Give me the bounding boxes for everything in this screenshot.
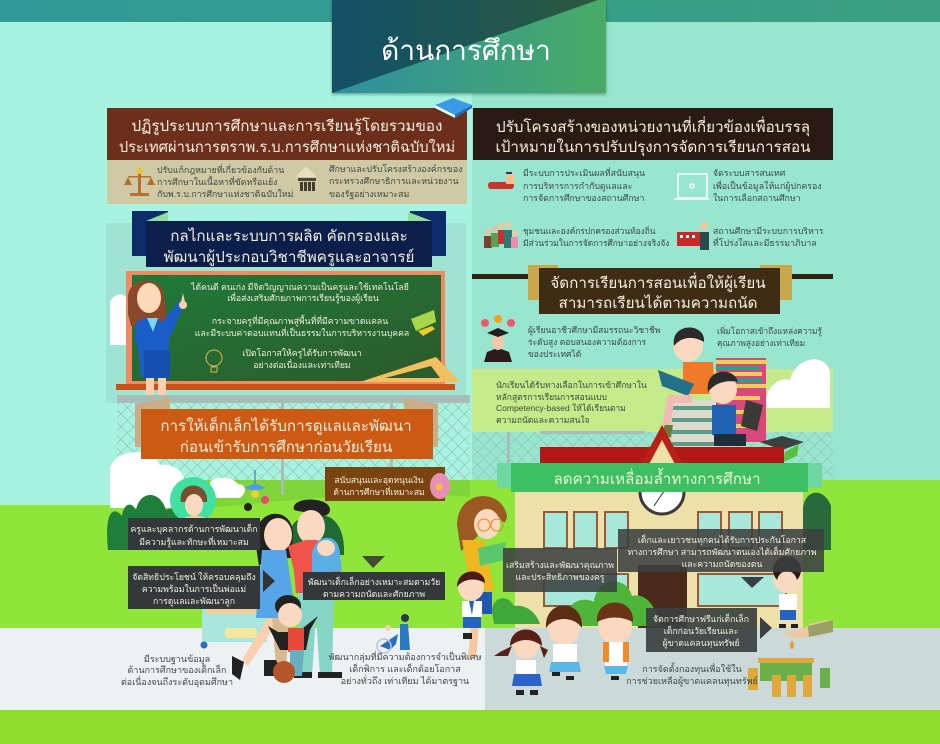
callout: free education: ผู้ขาดแคลนทุนทรัพย์	[662, 638, 740, 649]
panel: chalkboard: อย่างต่อเนื่องและเท่าเทียม	[253, 359, 351, 370]
text: funding for the needy: การช่วยเหลือผู้ขาดแคลนทุนทรัพย์	[626, 675, 758, 687]
callout: funding support: ด้านการศึกษาที่เหมาะสม	[333, 486, 425, 497]
icon: money	[411, 310, 436, 336]
money pile	[748, 658, 830, 697]
callout: benefits: ความพร้อมในการเป็นพ่อแม่	[142, 583, 246, 594]
text: special needs: อย่างทั่วถึง เท่าเทียม ได้มาตรฐาน	[341, 674, 469, 687]
text: database: มีระบบฐานข้อมูล	[144, 654, 210, 665]
child: boy right	[773, 556, 801, 628]
text: special needs	[328, 650, 482, 687]
callout: benefits	[128, 566, 275, 609]
panel: chalkboard: ได้คนดี คนเก่ง มีจิตวิญญาณความเป็นครูและใช้เทคโนโลยี	[190, 281, 409, 293]
panel: education reform: ศึกษาและปรับโครงสร้างองค์กรของ	[329, 164, 462, 174]
panel: learner outcomes: ระดับสูง ตอบสนองความต้องการ	[528, 337, 647, 348]
panel: chalkboard	[116, 271, 460, 390]
panel: restructuring: เพื่อเป็นข้อมูลให้แก่ผู้ปกครอง	[713, 180, 822, 192]
callout: teacher quality: และประสิทธิภาพของครู	[516, 572, 605, 583]
panel: reduce inequality heading	[497, 463, 822, 492]
icon: school with teacher	[677, 222, 709, 250]
cloud: right	[766, 359, 830, 408]
panel: chalkboard: และมีระบบค่าตอบแทนที่เป็นธรรมในการบริหารงานบุคคล	[195, 327, 409, 339]
callout: teacher quality: เสริมสร้างและพัฒนาคุณภาพ	[506, 560, 614, 571]
panel: chalkboard: เพื่อส่งเสริมศักยภาพการเรียนรู้ของผู้เรียน	[227, 292, 379, 304]
callout: child development: พัฒนาเด็กเล็กอย่างเหมาะสมตามวัย	[308, 576, 440, 587]
text: funding for the needy	[626, 662, 758, 687]
text: database: ต่อเนื่องจนถึงระดับอุดมศึกษา	[121, 675, 233, 688]
panel: teacher heading: พัฒนาผู้ประกอบวิชาชีพครูและอาจารย์	[164, 248, 414, 266]
school building	[492, 425, 831, 628]
illustration: teacher	[128, 280, 187, 395]
panel: education reform	[107, 108, 467, 204]
callout: caregivers skills: มีความรู้และทักษะที่เหมาะสม	[139, 536, 249, 548]
panel: restructuring: ที่โปร่งใสและมีธรรมาภิบาล	[713, 237, 817, 248]
panel: restructuring: ชุมชนและองค์กรปกครองส่วนท้องถิ่น	[523, 225, 656, 237]
icon: piggy bank	[430, 473, 450, 499]
panel: education reform: ประเทศผ่านการตราพ.ร.บ.การศึกษาแห่งชาติฉบับใหม่	[119, 138, 455, 156]
panel: restructuring	[473, 108, 833, 250]
hand with coin	[780, 620, 833, 649]
callout: benefits: การดูแลและพัฒนาลูก	[153, 596, 235, 607]
callout: child development: ตามความถนัดและศักยภาพ	[323, 589, 425, 599]
child: girl pigtails	[494, 630, 548, 695]
panel: restructuring: เป้าหมายในการปรับปรุงการจัดการเรียนการสอน	[496, 138, 810, 157]
panel: restructuring: การบริหารการกำกับดูแลและ	[523, 181, 632, 192]
text: special needs: เด็กพิการ และเด็กด้อยโอกาส	[349, 662, 461, 674]
callout: caregivers skills: ครูและบุคลากรด้านการพัฒนาเด็ก	[130, 523, 258, 535]
panel: teacher heading	[132, 211, 446, 267]
callout: equal opportunity: ทางการศึกษา สามารถพัฒนาตนเองได้เต็มศักยภาพ	[627, 546, 817, 557]
panel: education reform: กระทรวงศึกษาธิการและหน่วยงาน	[329, 176, 458, 186]
panel: adapted learning heading: จัดการเรียนการสอนเพื่อให้ผู้เรียน	[550, 272, 766, 292]
title banner	[332, 0, 606, 93]
panel: teacher heading: กลไกและระบบการผลิต คัดกรองและ	[170, 227, 408, 245]
child: boy left	[457, 571, 485, 639]
panel: education reform: ของรัฐอย่างเหมาะสม	[329, 189, 409, 200]
panel: education reform: ปรับแก้กฎหมายที่เกี่ยวข้องกับด้าน	[157, 164, 284, 175]
icon: ministry building	[296, 166, 317, 191]
text: special needs: พัฒนากลุ่มที่มีความต้องการจำเป็นพิเศษ	[328, 650, 482, 663]
panel: restructuring: สถานศึกษามีระบบการบริหาร	[713, 226, 824, 236]
callout: free education: จัดการศึกษาฟรีแก่เด็กเล็ก	[653, 613, 749, 624]
panel: reduce inequality heading: ลดความเหลื่อมล้ำทางการศึกษา	[553, 468, 761, 488]
panel: education reform: การศึกษาในเนื้อหาที่ขัดหรือแย้ง	[157, 175, 277, 187]
panel: learner outcomes: คุณภาพสูงอย่างเท่าเทียม	[717, 338, 805, 349]
title banner: ด้านการศึกษา	[381, 35, 551, 66]
illustration: family	[200, 500, 344, 683]
callout: equal opportunity: เด็กและเยาวชนทุกคนได้รับการประกันโอกาส	[638, 534, 807, 546]
icon: baby mobile	[244, 470, 269, 511]
panel: learner outcomes: หลักสูตรการเรียนการสอนแบบ	[496, 392, 607, 403]
illustration: children reading on books	[658, 327, 804, 462]
text: funding for the needy: การจัดตั้งกองทุนเพื่อใช้ใน	[642, 662, 742, 675]
panel: early childhood heading	[135, 398, 438, 459]
panel: learner outcomes: เพิ่มโอกาสเข้าถึงแหล่งความรู้	[717, 325, 822, 337]
panel: learner outcomes: ของประเทศได้	[528, 349, 581, 359]
panel: restructuring: ปรับโครงสร้างของหน่วยงานที่เกี่ยวข้องเพื่อบรรลุ	[496, 116, 810, 137]
panel: learner outcomes: นักเรียนได้รับทางเลือกในการเข้าศึกษาใน	[496, 380, 647, 390]
illustration: schoolchildren	[457, 556, 833, 697]
icon: caregiver avatar	[170, 477, 216, 523]
text: database	[121, 654, 233, 688]
callout: teacher quality	[503, 548, 617, 592]
panel: early childhood heading: การให้เด็กเล็กได้รับการดูแลและพัฒนา	[160, 416, 412, 435]
panel: adapted learning heading	[472, 265, 833, 314]
panel: early childhood heading: ก่อนเข้ารับการศึกษาก่อนวัยเรียน	[180, 439, 392, 456]
child: girl jumping	[546, 606, 582, 680]
panel: learner outcomes	[481, 315, 822, 425]
icon: set square ruler	[360, 357, 460, 382]
icon: laptop	[674, 174, 709, 199]
panel: adapted learning heading: สามารถเรียนได้ตามความถนัด	[559, 294, 757, 312]
icon: rating	[488, 172, 514, 189]
icon: book	[435, 98, 472, 118]
text: database: ด้านการศึกษาของเด็กเล็ก	[128, 663, 226, 675]
illustration: wheelchair helper	[377, 614, 410, 653]
clouds	[110, 452, 190, 508]
panel: education reform: ปฏิรูประบบการศึกษาและการเรียนรู้โดยรวมของ	[132, 117, 442, 135]
callout: child development	[303, 556, 445, 600]
panel: chalkboard: เปิดโอกาสให้ครูได้รับการพัฒนา	[242, 348, 362, 359]
callout: equal opportunity: และความถนัดของตน	[682, 559, 762, 569]
icon: scales	[124, 168, 155, 196]
panel: restructuring: มีระบบการประเมินผลที่สนับสนุน	[523, 167, 645, 179]
crib	[202, 608, 267, 642]
bushes	[107, 495, 250, 550]
cloud: small behind mobile	[210, 478, 245, 498]
callout: free education	[646, 608, 772, 652]
illustration: teacher with books	[457, 496, 507, 658]
child: boy jumping	[597, 602, 633, 680]
callout: benefits: จัดสิทธิประโยชน์ ให้ครอบคลุมถึง	[132, 572, 256, 583]
icon: light bulb	[206, 350, 222, 372]
panel: learner outcomes: ความถนัดและความสนใจ	[496, 415, 590, 425]
panel: education reform: กับพ.ร.บ.การศึกษาแห่งชาติฉบับใหม่	[157, 189, 293, 199]
panel: restructuring: ในการเลือกสถานศึกษา	[713, 193, 801, 203]
callout: funding support: สนับสนุนและอุดหนุนเงิน	[334, 475, 424, 486]
cloud: behind teacher	[110, 294, 130, 345]
panel: chalkboard: กระจายครูที่มีคุณภาพสู่พื้นที่ที่มีความขาดแคลน	[212, 314, 388, 327]
panel: restructuring: มีส่วนร่วมในการจัดการศึกษาอย่างจริงจัง	[523, 238, 669, 248]
callout: funding support	[325, 467, 450, 501]
panel: learner outcomes: ผู้เรียนอาชีวศึกษามีสมรรถนะวิชาชีพ	[528, 325, 660, 336]
panel: restructuring: การจัดการศึกษาของสถานศึกษา	[523, 193, 644, 203]
icon: graduate	[481, 315, 515, 362]
icon: community	[484, 222, 518, 248]
callout: free education: เด็กก่อนวัยเรียนและ	[664, 625, 738, 636]
callout: caregivers skills	[128, 518, 260, 550]
panel: restructuring: จัดระบบสารสนเทศ	[713, 168, 786, 178]
panel: learner outcomes: Competency-based ให้ได้เรียนตาม	[496, 403, 626, 413]
callout: equal opportunity	[618, 529, 824, 588]
